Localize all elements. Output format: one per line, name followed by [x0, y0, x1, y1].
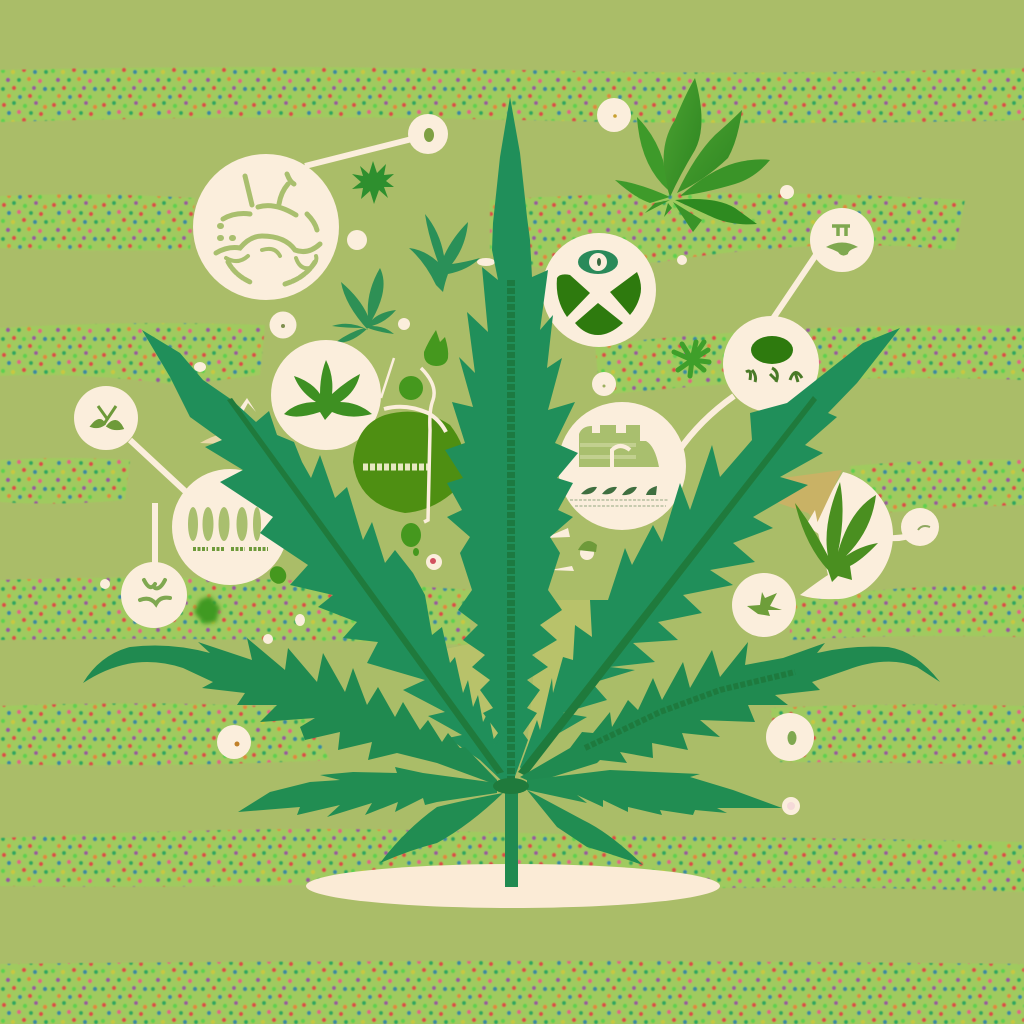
node: bottom right small plant — [732, 573, 796, 637]
connector lines — [130, 139, 920, 566]
leaflet: lower — [673, 202, 702, 232]
icon: plant in right crescent — [795, 482, 878, 582]
small dots: right cluster — [426, 98, 794, 571]
dot: leaf tip — [782, 797, 800, 815]
leaflet: top — [664, 78, 702, 197]
circle: pills diagram — [172, 469, 288, 585]
base ellipse — [306, 864, 720, 908]
node: top right small icon — [810, 208, 874, 272]
yellow-green fill between lower leaves — [440, 600, 600, 770]
leaflet: small stubs — [645, 200, 672, 217]
dot: lower right large — [766, 713, 814, 761]
leaflet: left top — [637, 117, 668, 190]
leaf: center midrib — [507, 280, 515, 790]
leaflet: left — [615, 180, 670, 203]
icon: green blotch lower left — [194, 596, 220, 624]
icon: green star burst — [352, 161, 394, 204]
node: small circle top of brain line — [408, 114, 448, 154]
small dots lower — [217, 713, 814, 815]
leaf: short lower right — [527, 790, 643, 865]
circle: building panel — [558, 402, 686, 530]
leaf: upper left midrib — [227, 398, 504, 774]
leaf: horizontal right — [527, 770, 782, 815]
circle: X wedge diagram with eye — [542, 233, 656, 347]
leaf: short lower left — [380, 793, 503, 863]
leaf: upper right midrib — [518, 396, 817, 776]
leaf: upper left — [142, 330, 507, 782]
icon: green blobs — [267, 330, 448, 587]
icon: green burst right — [674, 342, 709, 376]
dark hub where leaves meet — [493, 778, 529, 794]
leaflet: right — [680, 159, 770, 196]
node: right small icon — [901, 508, 939, 546]
circle: right crescent with tan shape — [778, 470, 893, 599]
lower right leaf dark marks — [585, 672, 795, 748]
leaf: lower left curved — [83, 638, 497, 785]
icon: teal plant upper — [409, 214, 495, 292]
stem — [505, 790, 518, 887]
leaf: horizontal left — [238, 767, 497, 817]
small dots: left cluster — [100, 230, 410, 644]
leaf: upper right — [520, 328, 900, 775]
circle: oval and marks — [723, 316, 819, 412]
leaflet: upper right — [677, 110, 742, 193]
circle: plant illustration — [271, 340, 381, 450]
main plant — [83, 97, 940, 908]
circle: brain diagram — [193, 154, 339, 300]
leaf: center — [445, 97, 578, 782]
circle: dark green blob with label bar — [353, 358, 466, 522]
node: lower left icon — [121, 562, 187, 628]
leaflet: lower right — [675, 199, 757, 224]
top right green leaf — [615, 78, 770, 232]
dot: lower left — [217, 725, 251, 759]
leaf: lower right curved — [520, 642, 940, 783]
icon: small plant lower — [332, 268, 396, 342]
node: left X icon — [74, 386, 138, 450]
